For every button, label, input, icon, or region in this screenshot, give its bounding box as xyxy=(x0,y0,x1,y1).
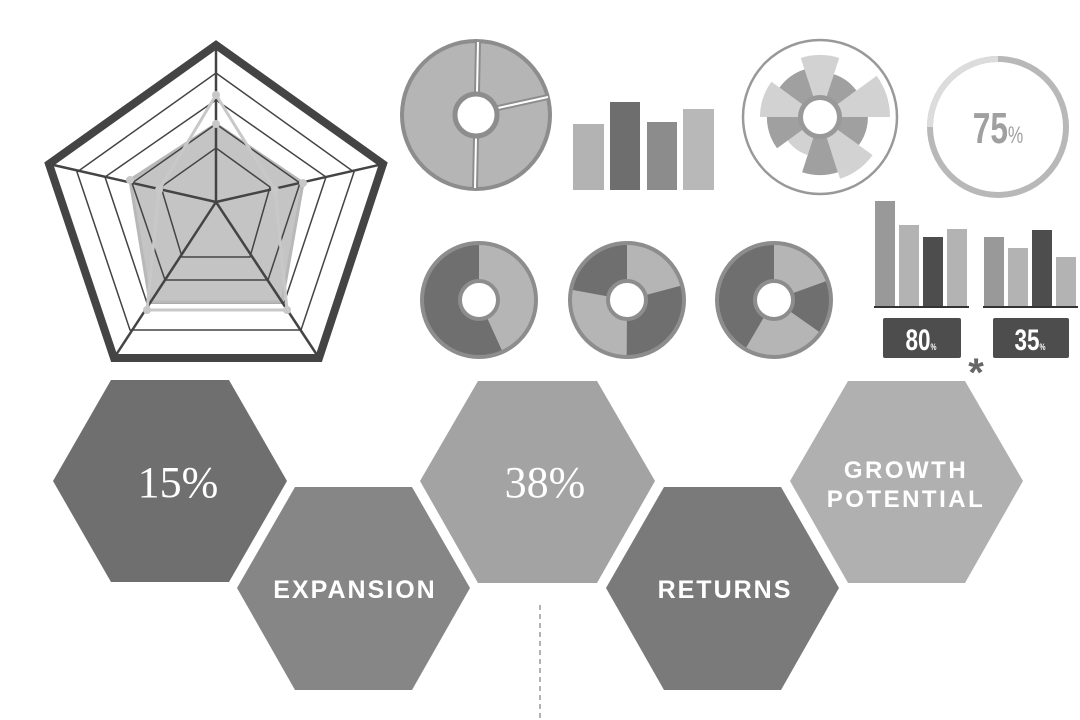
hexagon 38%: 38% xyxy=(505,458,585,507)
donut small 1 xyxy=(422,243,536,357)
bar group 80% xyxy=(874,201,969,358)
hexagon 15% xyxy=(53,380,287,582)
donut small 2 xyxy=(570,243,684,357)
donut chart large xyxy=(402,41,550,189)
hexagon RETURNS: RETURNS xyxy=(658,576,792,604)
hexagon EXPANSION: EXPANSION xyxy=(273,576,437,604)
bar group 80%: 80% xyxy=(905,323,937,357)
polar area chart xyxy=(743,40,897,194)
hexagon GROWTH POTENTIAL: GROWTH xyxy=(844,457,968,484)
radar chart xyxy=(49,45,383,358)
hexagon RETURNS xyxy=(606,487,839,690)
bar group 35% xyxy=(983,230,1078,358)
asterisk icon: * xyxy=(968,351,984,395)
hexagon GROWTH POTENTIAL: POTENTIAL xyxy=(827,486,985,513)
bar chart top xyxy=(573,102,714,190)
radar data area xyxy=(130,124,303,302)
hexagon 15%: 15% xyxy=(138,458,218,507)
label 75%: 75% xyxy=(973,104,1023,153)
progress ring 75% xyxy=(930,59,1066,195)
donut small 3 xyxy=(717,243,831,357)
dashed divider xyxy=(539,605,541,720)
hexagon 38% xyxy=(420,381,655,583)
bar group 35%: 35% xyxy=(1014,323,1046,357)
hexagon GROWTH POTENTIAL xyxy=(790,381,1023,583)
hexagon EXPANSION xyxy=(237,487,470,690)
